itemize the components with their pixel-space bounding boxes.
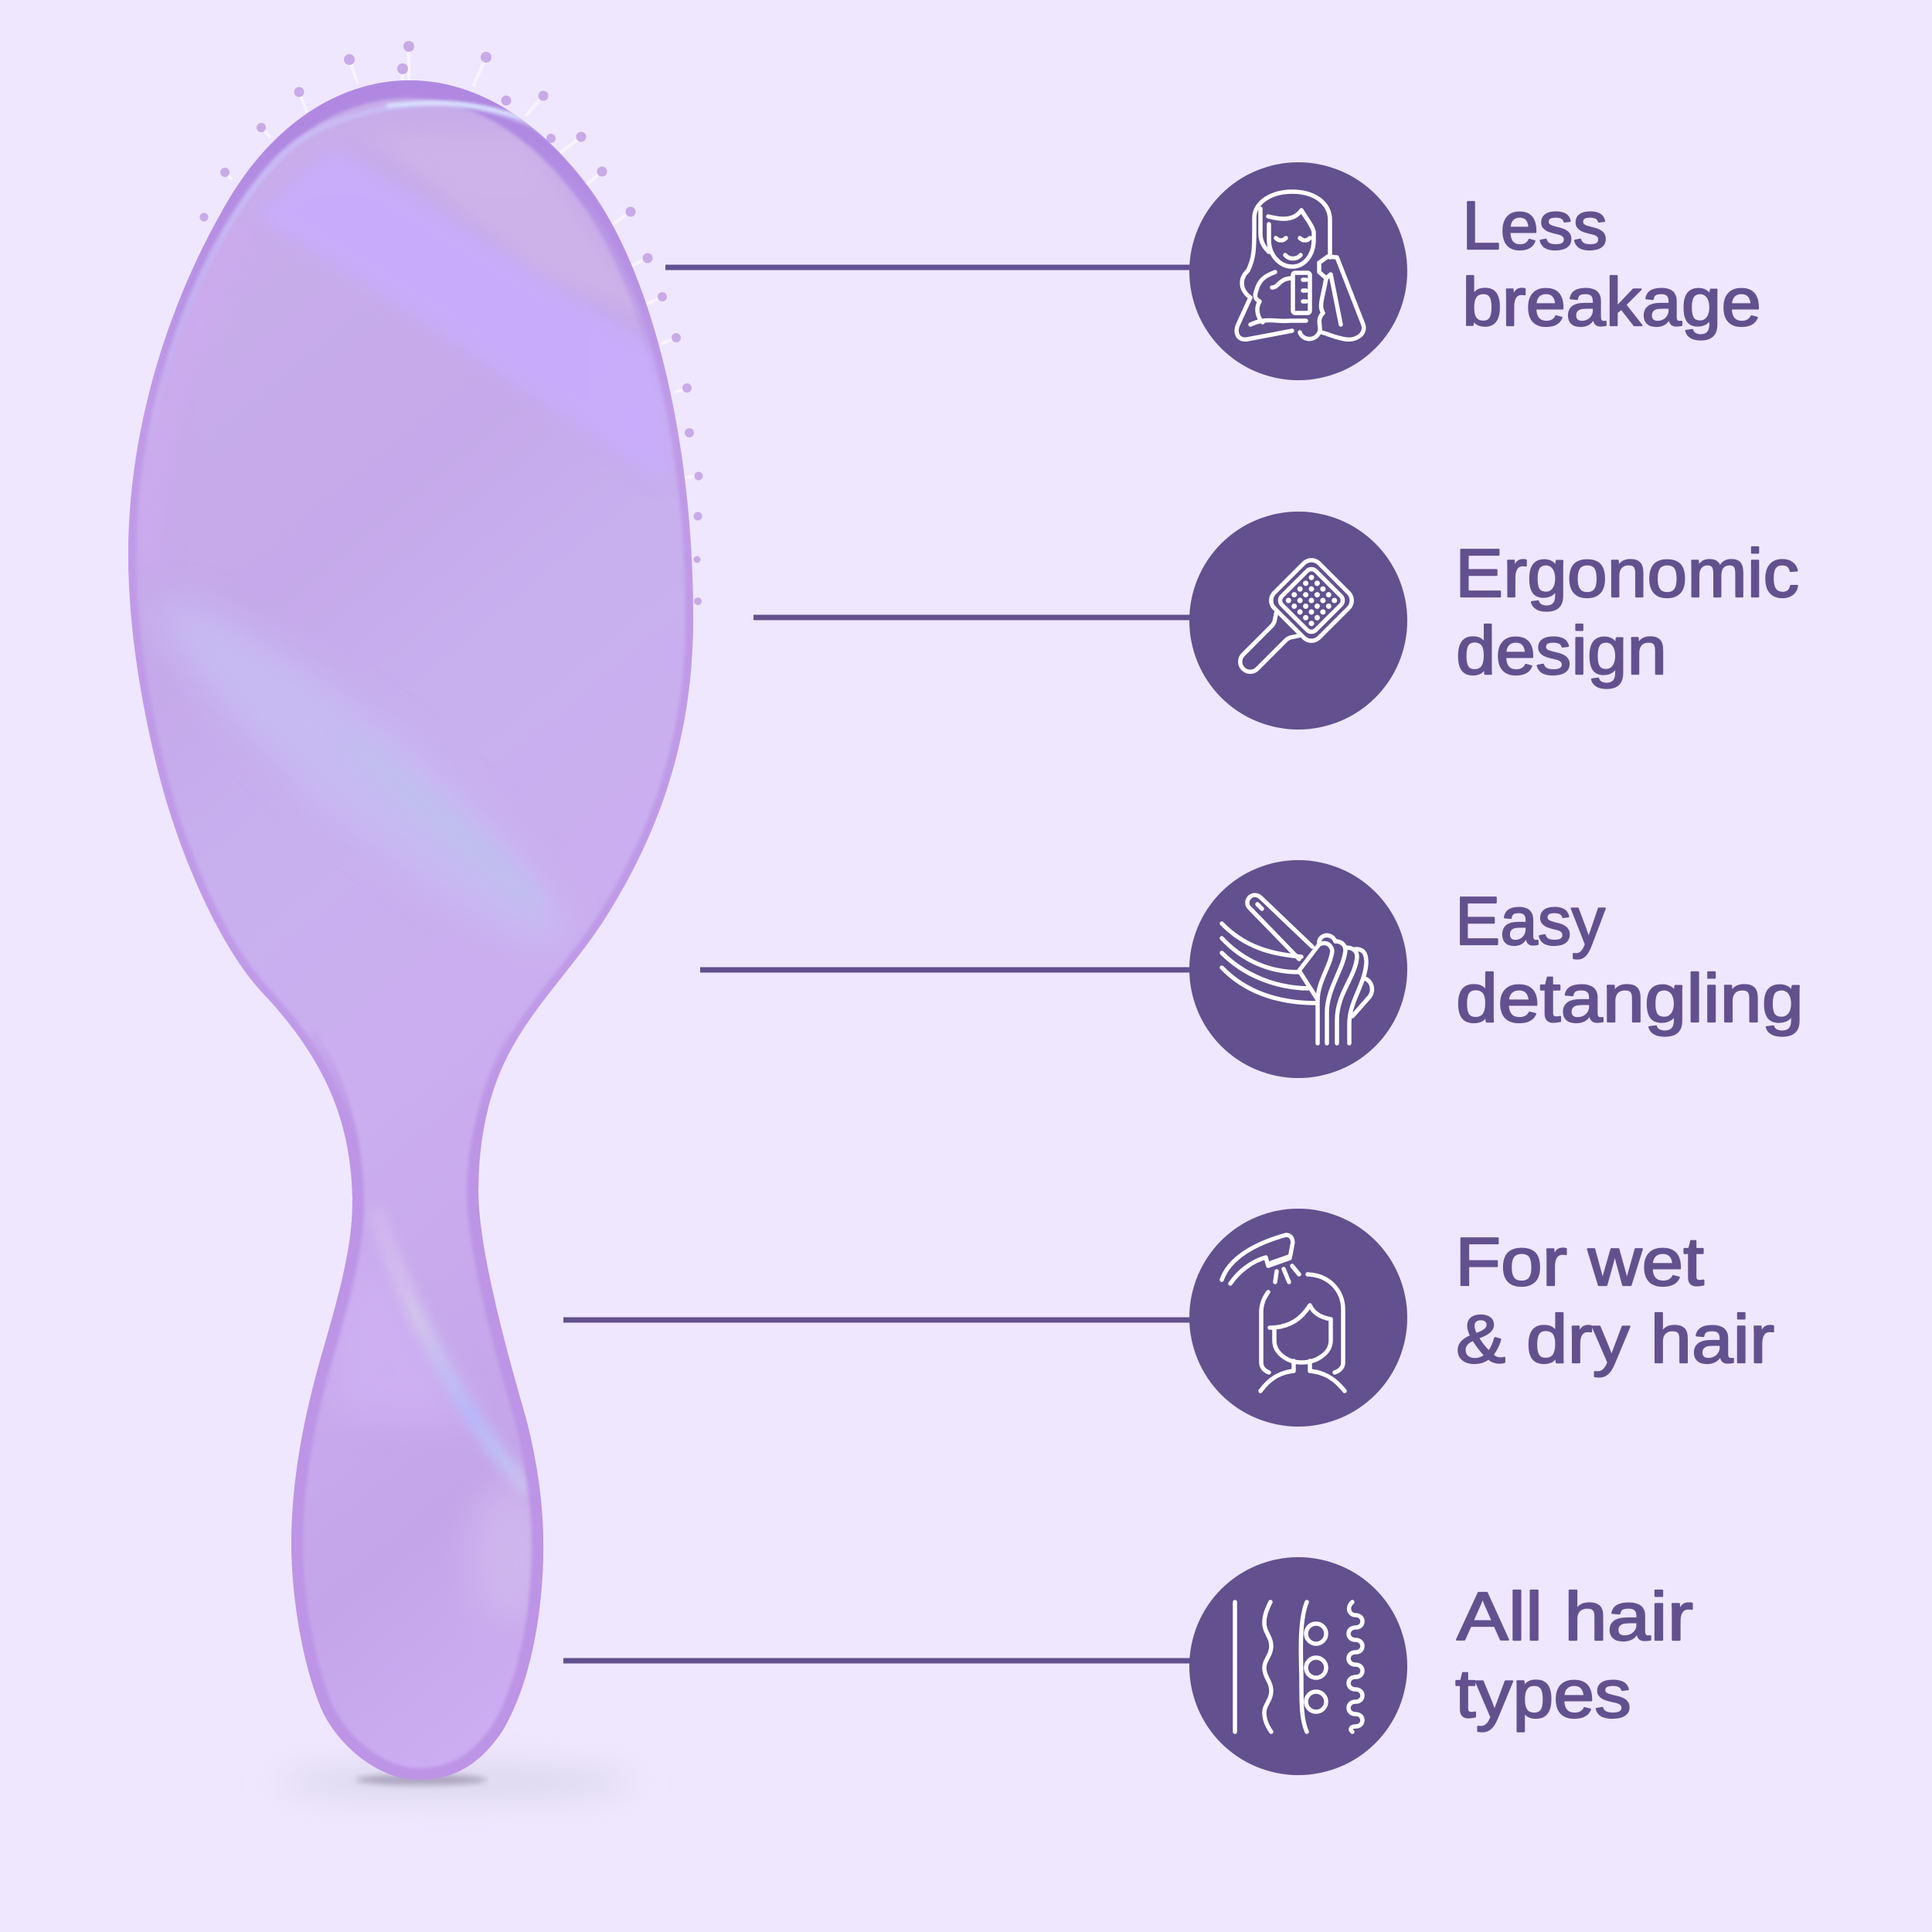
handle rim	[291, 1036, 543, 1780]
label: detangling	[1456, 960, 1804, 1036]
icon circle	[1189, 162, 1407, 380]
label	[1455, 1223, 1774, 1377]
bristles	[199, 41, 703, 605]
handle lower tone	[474, 1492, 531, 1609]
feature 4: for wet and dry hair	[1189, 1209, 1774, 1427]
connector line 5	[563, 1658, 1191, 1663]
feature 5: all hair types	[1189, 1557, 1693, 1775]
label: types	[1455, 1655, 1631, 1732]
upper grey-pink panel	[485, 168, 621, 297]
feature 1: less breakage	[1189, 162, 1761, 380]
handle streak	[376, 1209, 529, 1492]
icon: comb through hair	[1222, 895, 1372, 1043]
label	[1455, 883, 1804, 1036]
icon circle	[1189, 860, 1407, 1078]
label	[1455, 1578, 1693, 1732]
lilac sheen band	[255, 147, 665, 483]
connector line 4	[563, 1317, 1191, 1323]
icon circle	[1189, 1557, 1407, 1775]
label: Easy	[1455, 883, 1605, 959]
connector line 2	[753, 615, 1191, 620]
icon: woman brushing hair	[1236, 192, 1364, 339]
label: All hair	[1457, 1578, 1693, 1655]
label	[1462, 187, 1761, 340]
connector line 1	[665, 264, 1191, 270]
left edge pink glow	[128, 209, 263, 587]
top highlight	[386, 103, 533, 121]
label: design	[1456, 612, 1667, 689]
iridescent streak	[335, 725, 553, 921]
label: & dry hair	[1456, 1301, 1774, 1377]
label	[1455, 535, 1799, 689]
feature 3: easy detangling	[1189, 860, 1804, 1078]
icon: shower over woman's head	[1222, 1235, 1345, 1391]
icon: four hair types	[1235, 1602, 1362, 1732]
handle sheen	[332, 1252, 471, 1422]
feature 2: ergonomic design	[1189, 512, 1799, 730]
connector line 3	[700, 968, 1191, 972]
icon circle	[1189, 512, 1407, 730]
label: Ergonomic	[1455, 535, 1799, 611]
top rim thickening	[185, 80, 647, 338]
brush shadow	[274, 1767, 638, 1798]
rim specular	[165, 99, 600, 371]
outer rim	[128, 80, 693, 1780]
brush illustration	[108, 41, 726, 1798]
icon: paddle brush	[1221, 556, 1356, 691]
label: breakage	[1462, 264, 1761, 340]
iridescent band	[167, 605, 549, 931]
icon circle	[1189, 1209, 1407, 1427]
label: For wet	[1455, 1223, 1704, 1300]
label: Less	[1462, 187, 1607, 264]
brush body	[108, 70, 726, 1793]
